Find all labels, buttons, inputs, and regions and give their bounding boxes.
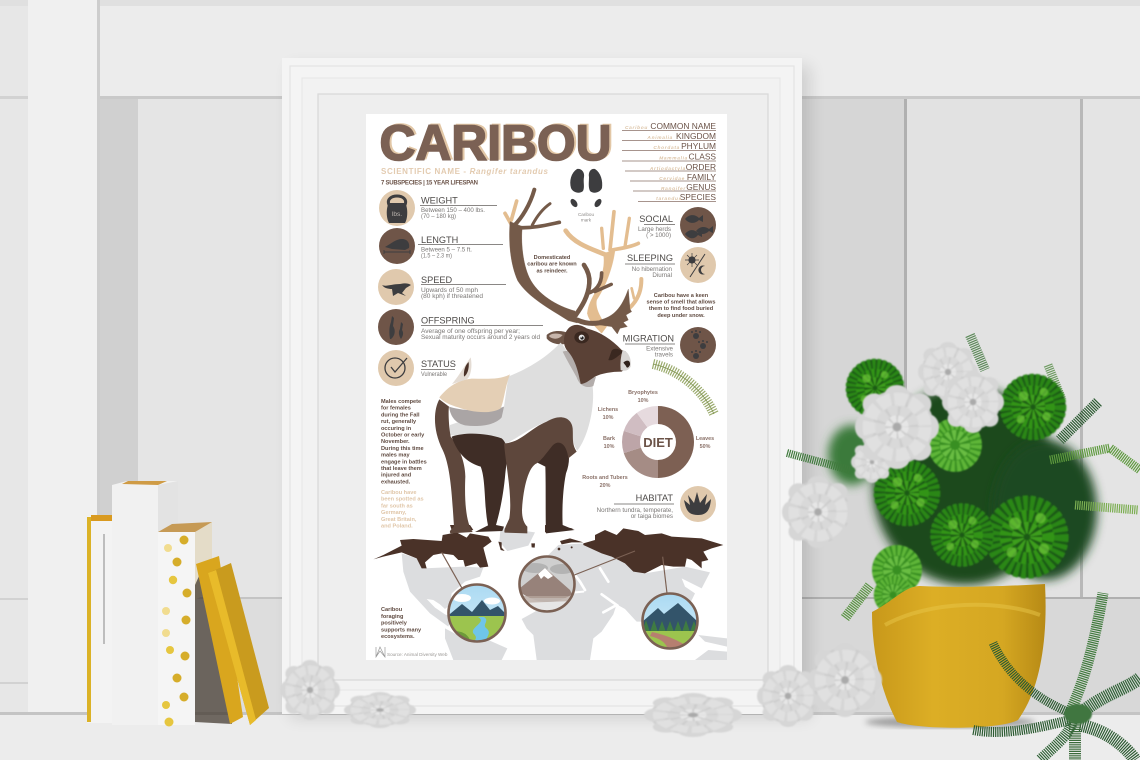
status block: STATUS [421, 359, 456, 369]
taxonomy list: tarandus [656, 196, 682, 202]
sleeping block [625, 247, 716, 283]
ear [547, 331, 569, 344]
text: males compete: that leave them [381, 466, 422, 472]
text: foraging: positively [381, 621, 408, 627]
text: males compete: Males compete [381, 399, 421, 405]
social block [638, 207, 716, 243]
speed block: Upwards of 50 mph [421, 287, 479, 294]
head [564, 325, 628, 384]
book: tall white [112, 481, 178, 725]
text: males compete: October or early [381, 432, 425, 438]
diet donut chart: 10% [638, 398, 649, 404]
migration block: Extensive [646, 346, 674, 352]
offspring block: Sexual maturity occurs around 2 years old [421, 334, 541, 341]
taxonomy list: CLASS [689, 152, 716, 162]
inland seas [545, 568, 617, 612]
social block: SOCIAL [639, 214, 673, 224]
text: domesticated: as reindeer. [536, 268, 568, 274]
text: foraging: ecosystems. [381, 634, 415, 640]
diet donut chart: Lichens [598, 407, 618, 413]
front antler [509, 190, 632, 334]
weight block [379, 190, 497, 226]
fronds [787, 335, 1140, 618]
speed block: SPEED [421, 275, 453, 285]
text: spotted south: Great Britain, [381, 517, 417, 523]
text: spotted south: Caribou have [381, 490, 416, 496]
muzzle [620, 350, 631, 371]
fern sprig at pot base [973, 593, 1140, 760]
icon: hoof print [569, 169, 603, 208]
eastern hemisphere [545, 525, 727, 660]
status block [378, 350, 456, 386]
diet donut chart: 20% [600, 483, 611, 489]
caribou illustration [435, 325, 631, 533]
social block: ( > 1000) [646, 232, 671, 239]
book: polka dot [158, 522, 212, 726]
text: males compete: rut, generally [381, 419, 417, 425]
text: males compete: November. [381, 439, 410, 445]
taxonomy list: Caribou [625, 125, 648, 131]
text: males compete: during the Fall [381, 412, 420, 418]
grey saddle shadow [449, 407, 504, 426]
source credit: Source: Animal Diversity Web [387, 652, 448, 657]
migration block [623, 327, 716, 363]
book shadow [195, 565, 232, 724]
text: males compete: During this time [381, 446, 424, 452]
far foreleg [537, 441, 575, 533]
text: foraging: Caribou [381, 607, 402, 613]
weight block: WEIGHT [421, 196, 458, 206]
book: gold-edged [87, 515, 112, 723]
subspecies and lifespan: 7 SUBSPECIES | 15 YEAR LIFESPAN [381, 180, 478, 186]
hoof caption: Caribou [578, 212, 594, 217]
taxonomy list: SPECIES [680, 192, 716, 202]
caribou antlers [505, 190, 641, 334]
diet donut chart: Roots and Tubers [582, 475, 628, 481]
diet donut chart: DIET [643, 435, 673, 450]
poster [366, 114, 727, 660]
dark cheek [608, 349, 623, 360]
books [87, 481, 269, 726]
migration block: MIGRATION [623, 334, 674, 344]
offspring block: Average of one offspring per year; [421, 328, 520, 335]
taxonomy list: FAMILY [687, 172, 716, 182]
hind leg outer [435, 399, 473, 533]
offspring block: OFFSPRING [421, 316, 475, 326]
plant: white blooms [782, 342, 1004, 548]
western hemisphere [373, 525, 550, 660]
diet donut chart: Leaves [696, 436, 714, 442]
text: males compete: males may [381, 453, 410, 459]
length block: LENGTH [421, 235, 458, 245]
picture frame [282, 58, 810, 718]
speed block: (80 kph) if threatened [421, 293, 484, 300]
text: males compete: engage in battles [381, 459, 427, 465]
habitat block: or taiga biomes [631, 513, 673, 520]
taxonomy list: PHYLUM [681, 141, 716, 151]
decorative flowers on shelf [280, 643, 882, 737]
eye [574, 331, 589, 343]
gold pot [865, 584, 1046, 728]
pale body [449, 343, 593, 451]
scientific name: SCIENTIFIC NAME - Rangifer tarandus [381, 167, 549, 176]
weight block: lbs. [392, 211, 402, 218]
taxonomy list: COMMON NAME [650, 121, 716, 131]
taxonomy list: Cervidae [659, 176, 685, 182]
tail [452, 357, 471, 384]
tan saddle [439, 374, 510, 412]
taxonomy list: GENUS [686, 182, 716, 192]
text: males compete: occuring in [381, 426, 412, 432]
length block [379, 228, 503, 264]
throat patch [563, 351, 596, 387]
status block: Vulnerable [421, 371, 447, 378]
sleeping block: SLEEPING [627, 253, 673, 263]
rear antler [505, 201, 641, 333]
title: CARIBOU [382, 114, 614, 170]
habitat vignette: river valley [447, 583, 507, 643]
icon: fern leaf [653, 364, 714, 414]
diet donut chart: Bark [603, 436, 615, 442]
source credit [376, 647, 448, 657]
habitat vignette: snowy peak [518, 555, 576, 613]
world map [373, 525, 727, 660]
text: spotted south: and Poland. [381, 524, 413, 530]
habitat vignette: forest [640, 592, 700, 651]
plant: green blooms [846, 359, 1068, 614]
sleeping block: No hibernation [632, 266, 673, 273]
taxonomy list: Chordata [653, 145, 680, 151]
weight block: (70 – 180 kg) [421, 213, 456, 220]
text: sense of smell: deep under snow. [657, 313, 705, 319]
weight block: Between 150 – 400 lbs. [421, 207, 485, 214]
taxonomy list [622, 121, 716, 202]
hind leg inner [452, 434, 507, 532]
habitat block: HABITAT [636, 493, 673, 503]
diet donut chart: 50% [700, 444, 711, 450]
taxonomy list: Artiodactyla [649, 166, 686, 172]
text: sense of smell: them to find food buried [649, 306, 714, 312]
text: foraging: foraging [381, 614, 404, 620]
shelf [0, 712, 1140, 760]
book: leaning gold back [196, 556, 243, 724]
nose [623, 361, 630, 368]
taxonomy list: Rangifer [661, 186, 686, 192]
taxonomy list: KINGDOM [676, 131, 716, 141]
text: spotted south: Germany, [381, 510, 407, 516]
text: males compete: exhausted. [381, 479, 411, 485]
offspring block [378, 309, 543, 345]
diet donut chart [582, 390, 714, 489]
text: males compete: for females [381, 406, 411, 412]
near foreleg and chest [504, 417, 577, 533]
text: spotted south: been spotted as [381, 497, 424, 503]
diet donut chart: 10% [603, 415, 614, 421]
text: sense of smell: sense of smell that allows [646, 300, 716, 306]
length block: Between 5 – 7.5 ft. [421, 246, 472, 254]
text: foraging: supports many [381, 627, 422, 633]
hoof caption: mark [581, 217, 592, 222]
sleeping block: Diurnal [652, 272, 672, 279]
title: CARIBOU [380, 115, 612, 171]
plant: foliage mass [787, 335, 1140, 618]
text: sense of smell: Caribou have a keen [654, 293, 708, 299]
diet donut chart: 10% [604, 444, 615, 450]
diet donut chart: Bryophytes [628, 390, 658, 396]
length block: (1.5 – 2.3 m) [421, 252, 452, 260]
text: domesticated: caribou are known [527, 262, 577, 268]
taxonomy list: ORDER [686, 162, 716, 172]
migration block: travels [655, 352, 673, 358]
social block: Large herds [638, 226, 671, 233]
text: domesticated: Domesticated [534, 255, 570, 261]
book: leaning gold front [208, 563, 269, 725]
taxonomy list: Mammalia [659, 156, 688, 162]
text: spotted south: far south as [381, 503, 413, 509]
speed block [378, 269, 506, 305]
taxonomy list: Animalia [646, 135, 673, 141]
text: males compete: injured and [381, 473, 412, 479]
habitat block [597, 486, 716, 522]
habitat block: Northern tundra, temperate, [597, 507, 673, 514]
